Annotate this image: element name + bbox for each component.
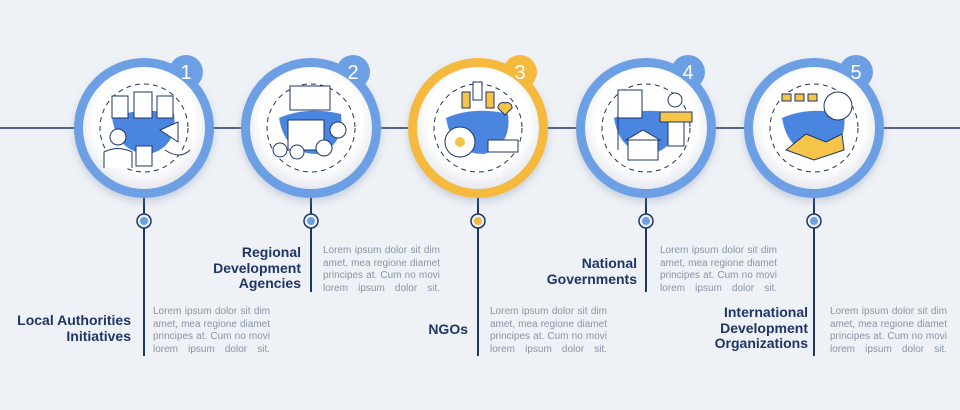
step 1 [74,55,214,356]
text 1: lorem ipsum dolor sit. [153,344,270,354]
text 5: amet, mea regione diamet [830,318,947,330]
text 4: principes at. Cum no movi [660,270,777,281]
text 2 [323,245,440,294]
text 3: amet, mea regione diamet [490,318,607,330]
text 5: principes at. Cum no movi [830,331,947,342]
text 5: Lorem ipsum dolor sit dim [830,306,947,317]
text 4 [660,245,777,294]
title 1: Local Authorities Initiatives [17,312,131,344]
text 3: lorem ipsum dolor sit. [490,344,607,354]
text 4: amet, mea regione diamet [660,258,777,268]
text 4: Lorem ipsum dolor sit dim [660,245,777,256]
text 5: lorem ipsum dolor sit. [830,344,947,354]
text 3: principes at. Cum no movi [490,331,607,342]
text 4: lorem ipsum dolor sit. [660,282,777,294]
text 1: principes at. Cum no movi [153,331,270,342]
step 5 [744,55,884,356]
text 2: Lorem ipsum dolor sit dim [323,245,440,256]
step 3: 3 [514,62,526,84]
step 4: 4 [682,62,694,84]
text 1: amet, mea regione diamet [153,318,270,330]
step 2: 2 [347,62,359,84]
title 5: International Development Organizations [715,304,808,351]
text 2: lorem ipsum dolor sit. [323,282,440,294]
step 2 [241,55,381,292]
step 1: 1 [180,62,192,84]
step 4 [576,55,716,292]
text 3: Lorem ipsum dolor sit dim [490,306,607,317]
step 5: 5 [850,62,862,84]
text 2: amet, mea regione diamet [323,258,440,268]
text 5 [830,306,947,354]
step 3 [408,55,548,356]
title 2: Regional Development Agencies [213,244,301,291]
title 3: NGOs [428,321,468,337]
title 4: National Governments [547,255,637,286]
text 1: Lorem ipsum dolor sit dim [153,306,270,317]
text 1 [153,306,270,354]
text 3 [490,306,607,354]
text 2: principes at. Cum no movi [323,270,440,281]
